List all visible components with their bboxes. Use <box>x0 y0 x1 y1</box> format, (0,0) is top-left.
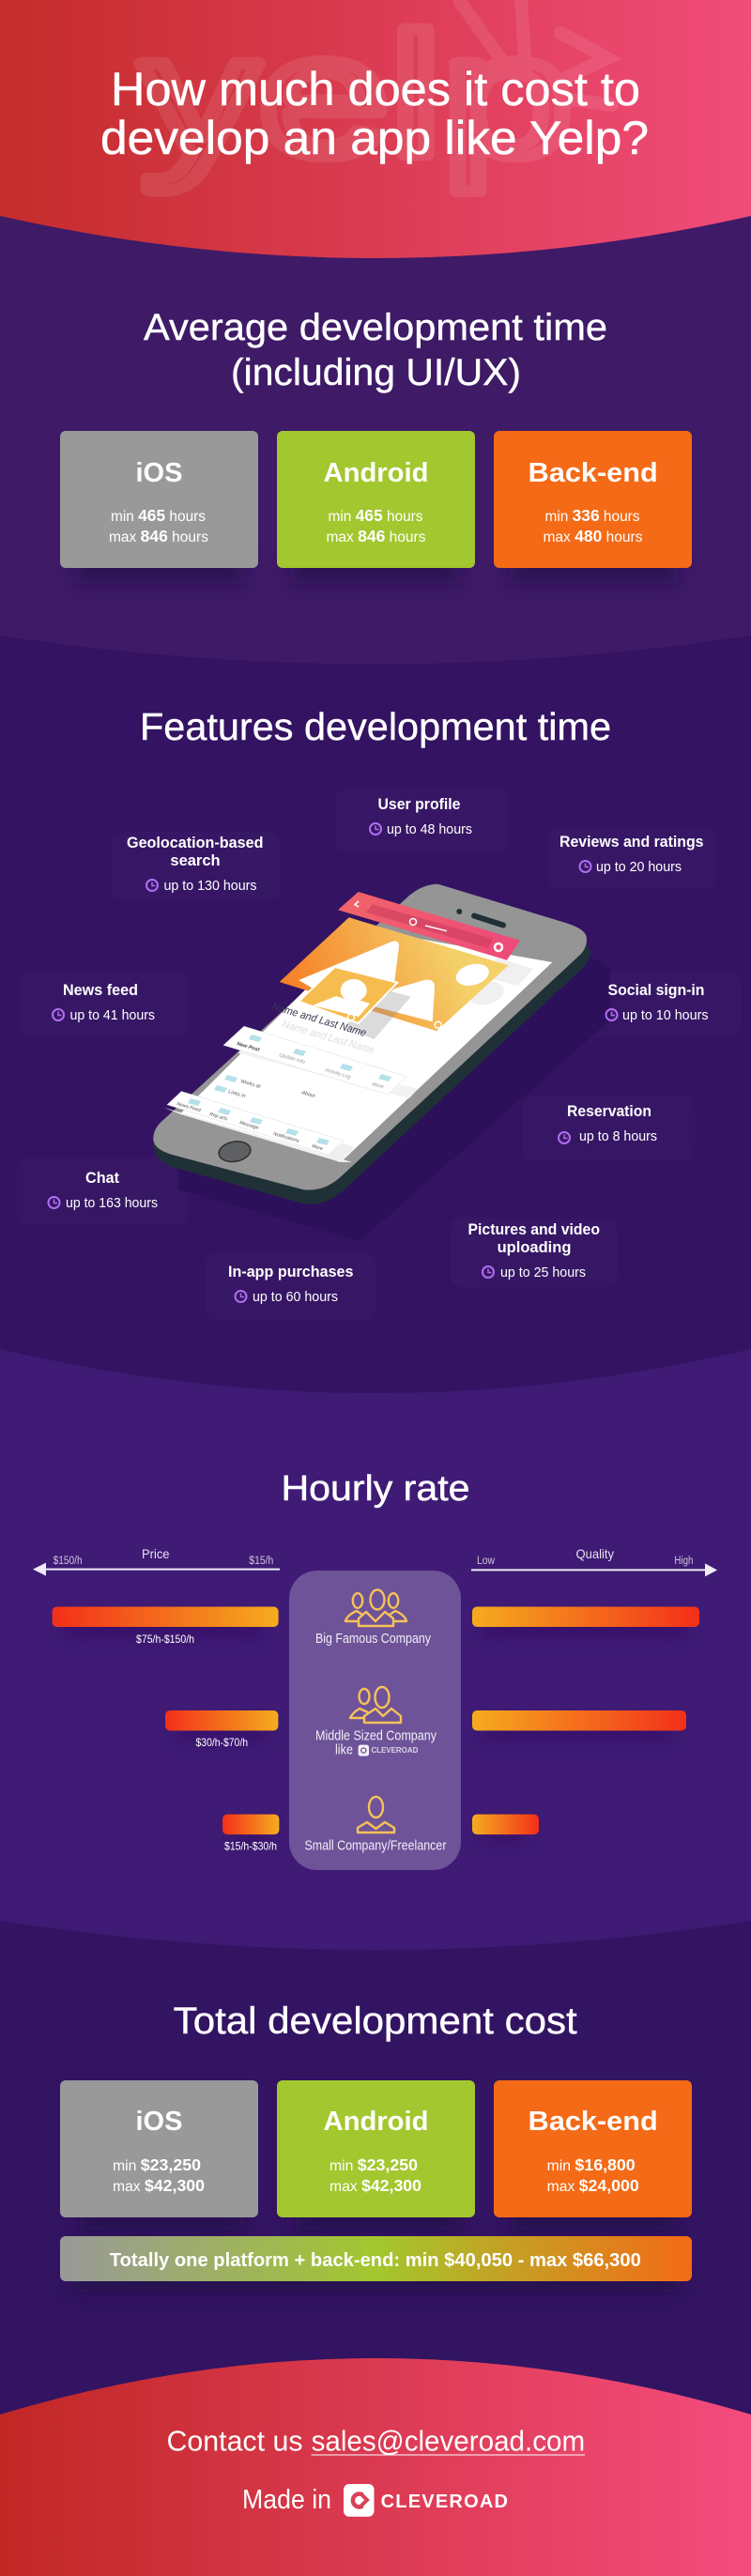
footer <box>0 2358 751 2576</box>
watermark: yelp <box>141 0 612 192</box>
contact line <box>167 2424 585 2458</box>
wordmark: CLEVEROAD <box>381 2492 508 2512</box>
logo: cleveroad <box>344 2484 374 2517</box>
feature panels <box>17 789 742 1321</box>
card: Android: min 465 hours <box>329 506 423 525</box>
made in cleveroad: Made in <box>242 2485 331 2515</box>
price arrow: $150/h <box>54 1556 83 1567</box>
card: Back-end: Back-end <box>529 458 658 488</box>
price arrow: Price <box>142 1546 170 1561</box>
feature: reviews and ratings <box>559 834 704 875</box>
card: Android <box>277 2080 475 2217</box>
feature: news feed: up to 41 hours <box>69 1008 155 1023</box>
card: Android: min $23,250 <box>330 2155 418 2174</box>
feature: pictures and video uploading: uploading <box>498 1239 571 1256</box>
section: average development time <box>60 307 692 584</box>
label: big famous company: Big Famous Company <box>315 1632 432 1647</box>
feature: in-app purchases <box>228 1264 353 1305</box>
icon: big company <box>345 1590 406 1626</box>
label: small company: Small Company/Freelancer <box>304 1838 447 1853</box>
card: Back-end: max $24,000 <box>547 2176 639 2195</box>
card shadows <box>70 2206 681 2292</box>
title <box>100 63 649 164</box>
action bar: More <box>371 1081 384 1090</box>
feature: social sign-in <box>606 982 708 1023</box>
phone illustration <box>153 884 610 1241</box>
card: iOS <box>60 2080 258 2217</box>
feature: reservation: up to 8 hours <box>579 1129 657 1144</box>
card: iOS: min $23,250 <box>113 2155 201 2174</box>
label: like cleveroad: like <box>335 1742 353 1757</box>
section: hourly rate <box>33 1469 717 1870</box>
price labels: $75/h-$150/h <box>136 1633 194 1646</box>
cover mountains <box>299 941 492 1021</box>
total bar: Totally one platform + back-end: min $40,050 - max $66,300 <box>110 2250 641 2271</box>
action bar: Lives in <box>227 1089 246 1099</box>
speaker and camera <box>456 909 503 926</box>
profile name: Name and Last Name <box>281 1019 376 1057</box>
feature: reservation: Reservation <box>567 1103 651 1120</box>
label: like cleveroad: CLEVEROAD <box>371 1746 419 1755</box>
card: iOS: iOS <box>135 458 182 488</box>
feature: user profile <box>370 796 472 837</box>
title: develop an app like Yelp? <box>100 112 649 164</box>
card: Back-end: min 336 hours <box>544 506 640 525</box>
price labels: $30/h-$70/h <box>195 1736 248 1749</box>
ghost layers <box>164 958 533 1162</box>
bottom tab bar <box>167 1092 344 1155</box>
camera marks <box>347 1014 441 1028</box>
feature: chat <box>49 1170 158 1211</box>
feature: news feed: News feed <box>63 982 138 999</box>
price bar: middle company <box>165 1710 278 1731</box>
feature: user profile: User profile <box>377 796 460 813</box>
price bar: small company <box>222 1815 279 1834</box>
card: Android: max 846 hours <box>327 527 426 545</box>
bottom tab bar: More <box>311 1143 324 1152</box>
bottom tab bar: News Feed <box>176 1101 202 1114</box>
heading <box>144 307 607 393</box>
quality bar: small company <box>472 1815 539 1834</box>
card: Android: Android <box>323 2107 428 2137</box>
feature: chat: up to 163 hours <box>66 1196 158 1211</box>
label: like cleveroad <box>335 1742 419 1757</box>
feature: social sign-in: up to 10 hours <box>622 1008 708 1023</box>
price arrow <box>33 1546 280 1576</box>
feature: reservation <box>559 1103 657 1144</box>
feature: geolocation-based search: up to 130 hours <box>163 879 257 894</box>
heading: Average development time <box>144 307 607 348</box>
section: total development cost <box>60 2001 692 2292</box>
price bar: big company <box>53 1607 279 1627</box>
action bar: Works at <box>239 1079 261 1090</box>
card: iOS: max $42,300 <box>113 2176 205 2195</box>
card: Back-end: Back-end <box>529 2107 658 2137</box>
card: Back-end <box>494 431 692 568</box>
bottom tab bar: Notifications <box>272 1131 300 1144</box>
card: Back-end: min $16,800 <box>547 2155 636 2174</box>
feature: pictures and video uploading <box>467 1221 600 1280</box>
bottom tab bar: Message <box>238 1120 259 1131</box>
icon: middle company <box>350 1687 401 1723</box>
toolbar <box>338 892 520 960</box>
home button <box>217 1139 253 1164</box>
feature: reviews and ratings: up to 20 hours <box>596 860 682 875</box>
action bar: About <box>299 1090 315 1099</box>
feature: geolocation-based search <box>127 835 263 894</box>
quality arrow: Quality <box>576 1546 614 1561</box>
feature: user profile: up to 48 hours <box>387 822 472 837</box>
heading: (including UI/UX) <box>231 352 521 393</box>
phone shadow <box>178 958 610 1241</box>
feature: reviews and ratings: Reviews and ratings <box>559 834 704 851</box>
card: Android: max $42,300 <box>330 2176 421 2195</box>
quality bar: big company <box>472 1607 699 1627</box>
header banner <box>0 0 751 258</box>
icon: small company <box>358 1797 394 1832</box>
action bar: Activity Log <box>323 1067 352 1081</box>
translucent gray overlay <box>345 990 411 1039</box>
feature: social sign-in: Social sign-in <box>608 982 704 999</box>
feature: in-app purchases: In-app purchases <box>228 1264 353 1280</box>
quality bar: middle company <box>472 1710 686 1731</box>
section: features development time <box>17 705 742 1321</box>
quality arrow: Low <box>477 1556 496 1567</box>
screen <box>180 929 552 1162</box>
bar shadows <box>66 1624 685 1840</box>
quality arrow <box>471 1546 717 1576</box>
card: Android: Android <box>323 458 428 488</box>
card: iOS: iOS <box>135 2107 182 2137</box>
quality arrow: High <box>674 1556 693 1567</box>
feature: in-app purchases: up to 60 hours <box>253 1290 338 1305</box>
bottom tab bar: Rep arts <box>208 1112 228 1123</box>
made in cleveroad <box>242 2484 508 2517</box>
label: middle sized company: Middle Sized Company <box>315 1729 437 1744</box>
heading: Hourly rate <box>282 1469 469 1509</box>
heading: Total development cost <box>174 2001 577 2042</box>
action bar: New Post <box>236 1041 261 1053</box>
profile picture <box>299 967 397 1023</box>
action bar <box>214 1026 406 1099</box>
phone body <box>153 884 587 1190</box>
feature: pictures and video uploading: up to 25 hours <box>500 1265 586 1280</box>
price arrow: $15/h <box>249 1556 273 1567</box>
card: iOS: max 846 hours <box>109 527 208 545</box>
card: Android <box>277 431 475 568</box>
card: Back-end <box>494 2080 692 2217</box>
card: iOS: min 465 hours <box>111 506 206 525</box>
feature: pictures and video uploading: Pictures and video <box>467 1221 600 1238</box>
total bar <box>60 2236 692 2281</box>
feature: geolocation-based search: Geolocation-based <box>127 835 263 851</box>
contact line: sales@cleveroad.com <box>312 2424 585 2458</box>
watermark: yelp: yelp <box>141 0 573 192</box>
heading: Features development time <box>140 705 611 748</box>
profile name: Name and Last Name <box>270 1001 367 1039</box>
feature: news feed <box>53 982 155 1023</box>
company panel <box>289 1571 461 1870</box>
card shadows <box>75 554 678 584</box>
price labels: $15/h-$30/h <box>224 1840 277 1853</box>
title: How much does it cost to <box>111 63 640 115</box>
feature: geolocation-based search: search <box>170 852 221 869</box>
action bar: Update Info <box>278 1052 305 1066</box>
card: Back-end: max 480 hours <box>543 527 643 545</box>
price labels <box>136 1633 277 1853</box>
phone side <box>153 897 590 1204</box>
card: iOS <box>60 431 258 568</box>
feature: chat: Chat <box>85 1170 119 1187</box>
orange cover image <box>280 917 509 1031</box>
contact line: Contact us <box>167 2424 302 2458</box>
